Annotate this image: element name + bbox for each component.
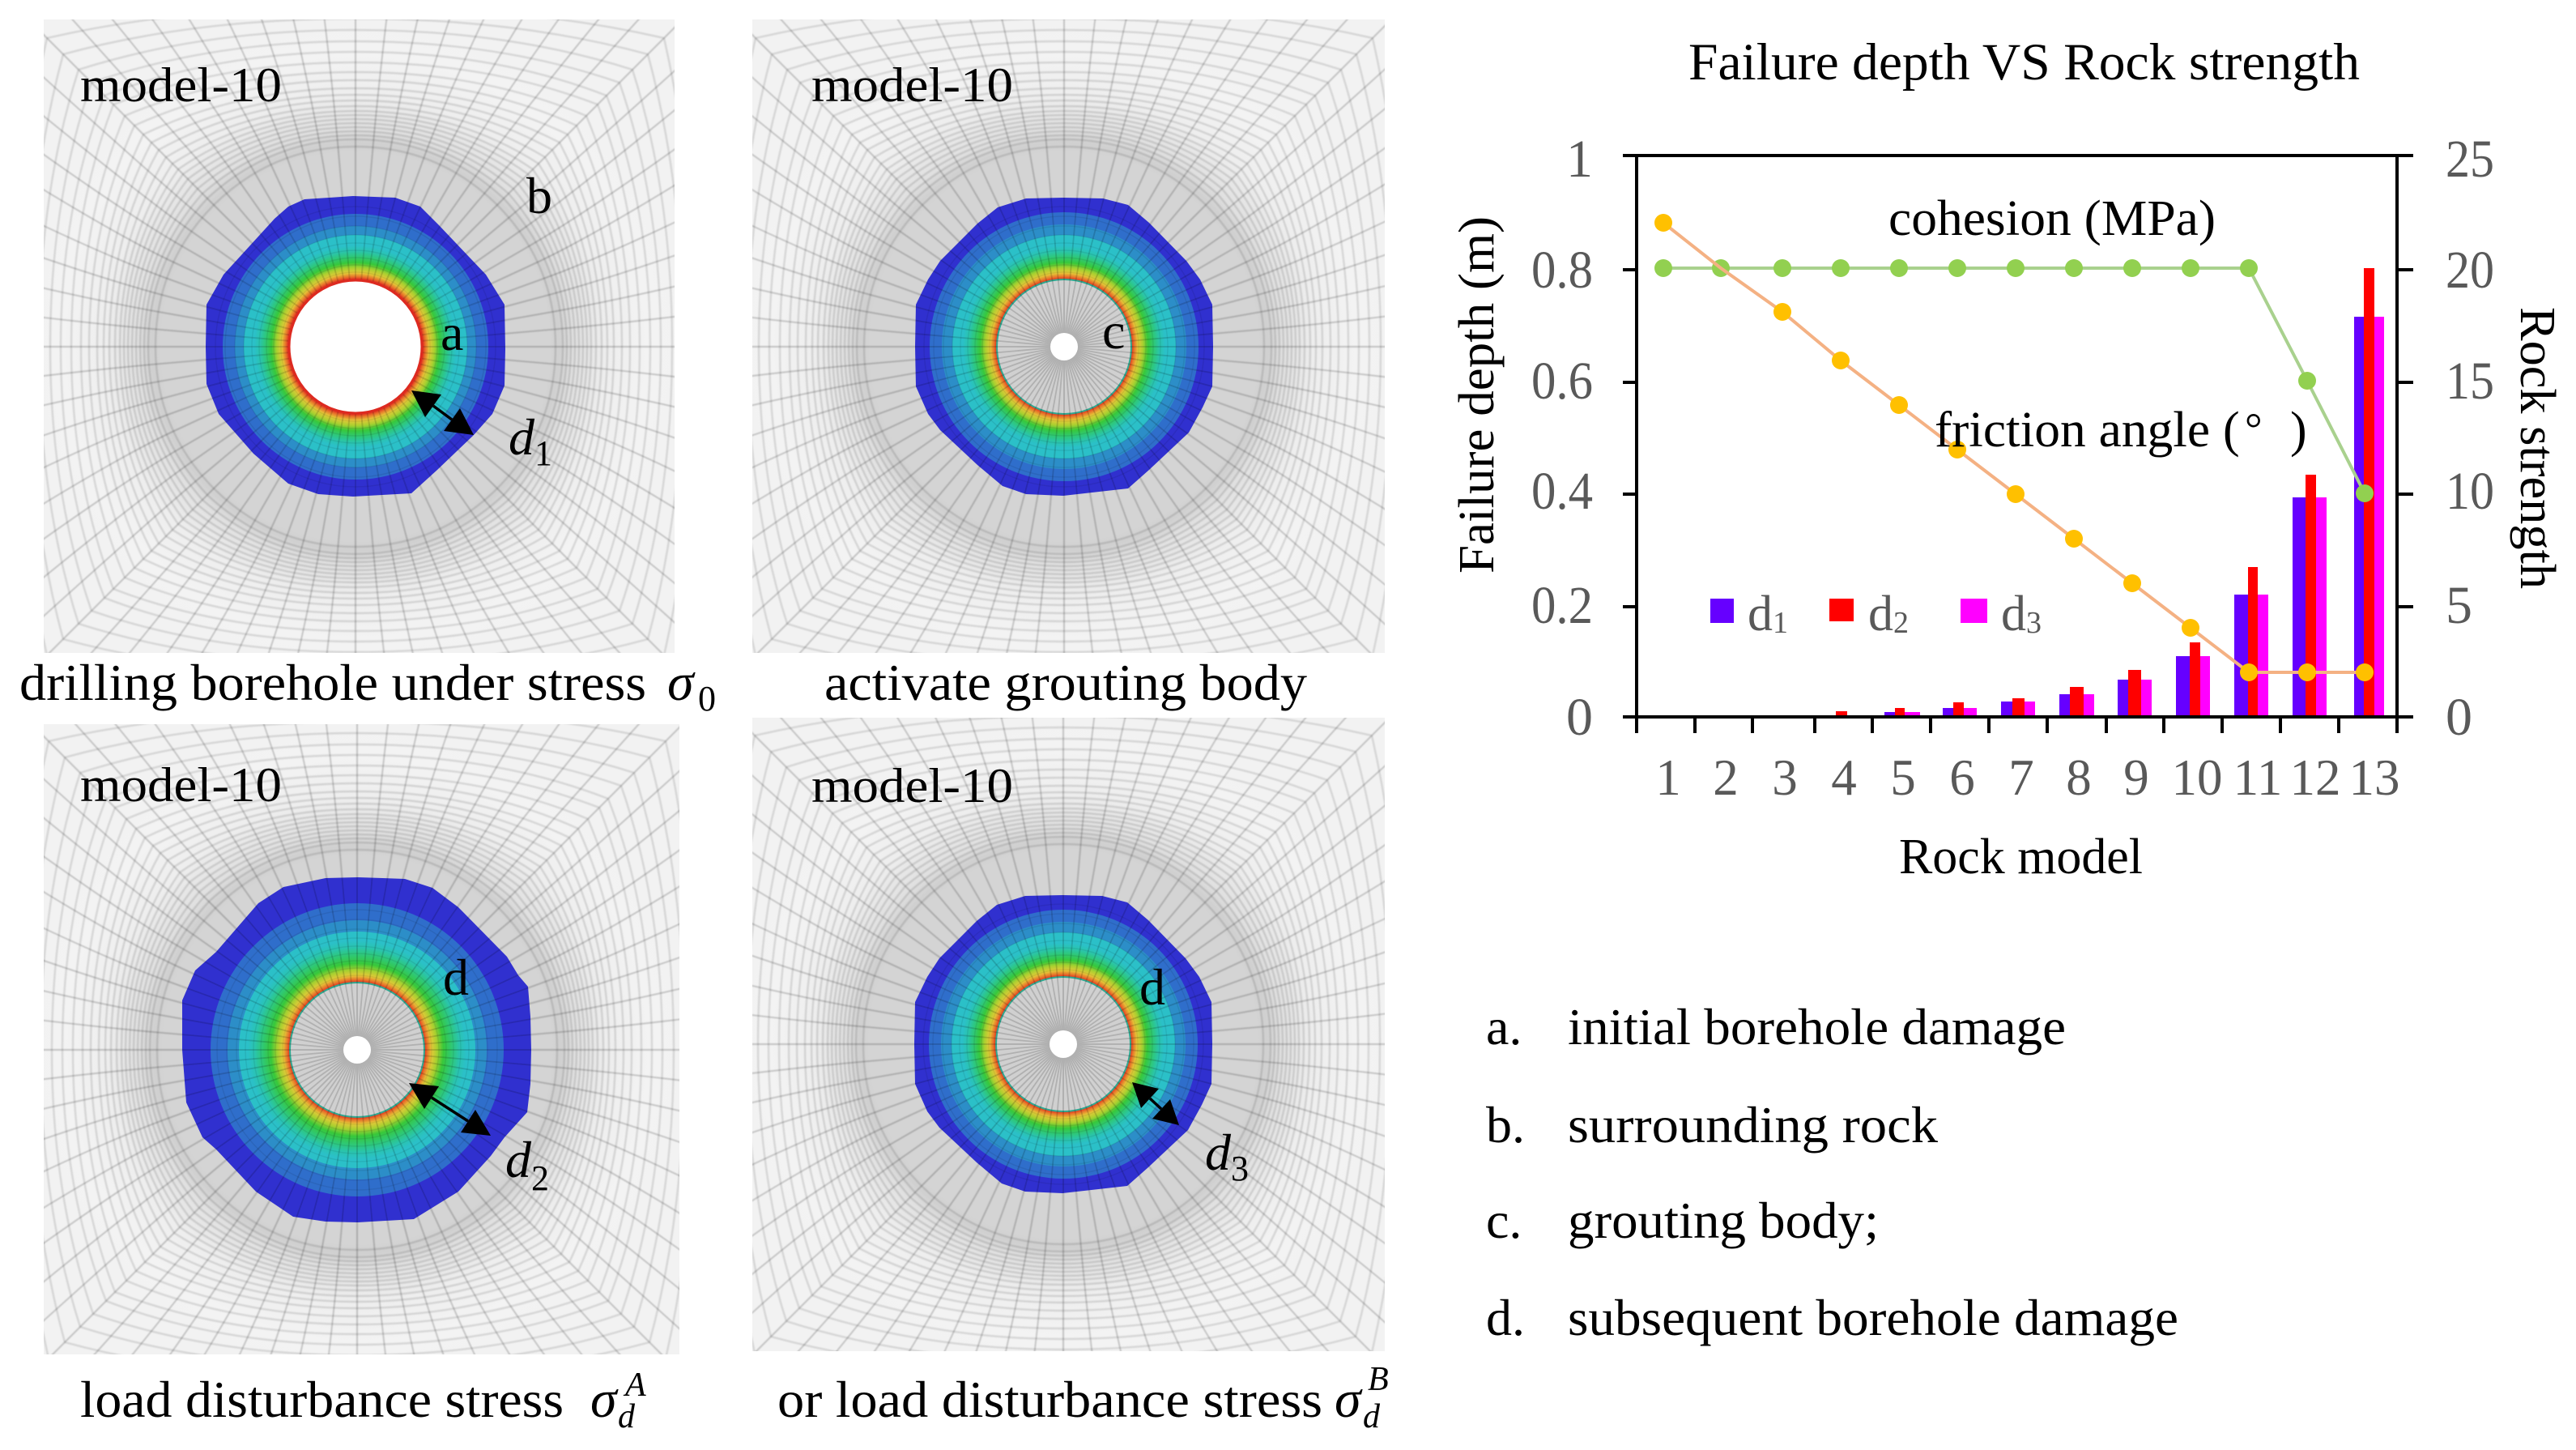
label: d3: 3 — [1231, 1149, 1249, 1188]
caption: load disturbance stress: σ — [590, 1370, 619, 1429]
caption: load disturbance stress: d — [618, 1398, 636, 1435]
right axis tick labels: 20 — [2446, 241, 2494, 300]
legend: d1 d2 d3: 2 — [1893, 606, 1909, 640]
caption: drilling borehole under stress: 0 — [698, 679, 716, 719]
mesh and damage contour 2 — [752, 19, 1385, 653]
item c: c. — [1486, 1192, 1522, 1249]
legend: d1 d2 d3 — [1710, 586, 2042, 642]
mesh and damage contour 3 — [44, 724, 679, 1354]
label: model-10: model-10 — [811, 58, 1013, 112]
series label: friction angle: ) — [2290, 403, 2307, 458]
line: cohesion — [1654, 259, 2374, 502]
caption: or load disturbance stress: B — [1368, 1361, 1389, 1398]
label: d2: 2 — [531, 1158, 549, 1198]
chart: failure depth vs rock strength — [1450, 33, 2565, 885]
x axis tick labels: 3 — [1772, 749, 1798, 806]
label: c: c — [1102, 302, 1125, 360]
legend: d1 d2 d3: d — [1748, 586, 1773, 642]
caption: drilling borehole under stress: drilling borehole under stress — [19, 654, 646, 711]
label: d3: d — [1205, 1124, 1231, 1181]
caption: load disturbance stress: load disturbance stress — [80, 1371, 564, 1428]
axes and ticks — [1623, 156, 2413, 733]
right axis tick labels: 10 — [2446, 462, 2494, 521]
right axis tick labels: 5 — [2446, 576, 2472, 635]
series label: cohesion: cohesion (MPa) — [1888, 191, 2216, 246]
bars: d1 d2 d3 — [1824, 268, 2384, 717]
left axis tick labels: 0.2 — [1531, 576, 1593, 635]
series label: friction angle: ( — [2223, 403, 2240, 458]
left axis tick labels: 1 — [1566, 130, 1593, 189]
panel: load disturbance stress B — [723, 704, 1403, 1435]
caption: or load disturbance stress — [777, 1361, 1389, 1435]
right axis tick labels: 15 — [2446, 352, 2494, 411]
label: model-10: model-10 — [80, 58, 282, 112]
caption: activate grouting body: activate grouting body — [824, 654, 1307, 711]
caption: drilling borehole under stress: σ — [667, 653, 696, 712]
x axis tick labels: 5 — [1890, 749, 1916, 806]
caption: load disturbance stress: A — [623, 1367, 646, 1404]
label: model-10: model-10 — [80, 758, 282, 812]
label: d: d — [1139, 958, 1165, 1016]
legend: d1 d2 d3: d — [1868, 586, 1893, 642]
right axis tick labels — [2446, 130, 2494, 747]
caption: or load disturbance stress: d — [1363, 1398, 1381, 1435]
label: d1: 1 — [534, 433, 552, 473]
x axis tick labels — [1655, 749, 2400, 806]
legend: abbreviations — [1486, 998, 2178, 1346]
x axis tick labels: 13 — [2348, 749, 2400, 806]
x axis tick labels: 11 — [2233, 749, 2282, 806]
label: a: a — [441, 304, 463, 361]
x axis tick labels: 9 — [2123, 749, 2149, 806]
caption: or load disturbance stress: σ — [1335, 1370, 1363, 1429]
legend: d1 d2 d3: 1 — [1773, 606, 1788, 640]
right axis tick labels: 0 — [2446, 688, 2472, 747]
panel: load disturbance stress A — [17, 710, 697, 1435]
secondary y axis title: rock strength: Rock strength — [2510, 307, 2565, 589]
x axis tick labels: 7 — [2008, 749, 2034, 806]
label: b: b — [526, 167, 552, 224]
label: d: d — [443, 949, 469, 1006]
x axis tick labels: 1 — [1655, 749, 1681, 806]
item d: d. — [1486, 1289, 1525, 1346]
line: friction angle — [1654, 214, 2374, 681]
x axis title: rock model: Rock model — [1899, 829, 2143, 885]
legend: d1 d2 d3: d — [2001, 586, 2026, 642]
left axis tick labels: 0.6 — [1531, 352, 1593, 411]
item a: a. — [1486, 998, 1522, 1056]
panel: activate grouting body — [724, 6, 1404, 711]
mesh and damage contour 4 — [752, 718, 1385, 1351]
x axis tick labels: 10 — [2172, 749, 2222, 806]
left axis tick labels: 0.4 — [1531, 462, 1593, 521]
series label: friction angle: friction angle — [1935, 403, 2210, 458]
panel: drilling borehole — [15, 6, 716, 719]
x axis tick labels: 12 — [2290, 749, 2340, 806]
item b: surrounding rock — [1568, 1096, 1938, 1154]
arrow: d3 — [1132, 1082, 1179, 1125]
right axis tick labels: 25 — [2446, 130, 2494, 189]
caption: or load disturbance stress: or load disturbance stress — [777, 1371, 1322, 1428]
item a: initial borehole damage — [1568, 998, 2066, 1056]
x axis tick labels: 6 — [1949, 749, 1975, 806]
mesh and damage contour 1 — [44, 19, 675, 653]
item b: b. — [1486, 1096, 1525, 1154]
left axis tick labels — [1531, 130, 1593, 747]
left axis tick labels: 0 — [1566, 688, 1593, 747]
x axis tick labels: 2 — [1713, 749, 1739, 806]
x axis tick labels: 4 — [1831, 749, 1857, 806]
y axis title: failure depth: Failure depth (m) — [1450, 216, 1505, 574]
arrow: d1 — [411, 390, 474, 435]
chart title: Failure depth VS Rock strength — [1688, 33, 2360, 92]
x axis tick labels: 8 — [2066, 749, 2092, 806]
item c: grouting body; — [1568, 1192, 1879, 1249]
left axis tick labels: 0.8 — [1531, 241, 1593, 300]
label: d2: d — [505, 1131, 531, 1188]
item d: subsequent borehole damage — [1568, 1289, 2178, 1346]
series label: friction angle: ° — [2245, 404, 2263, 453]
legend: d1 d2 d3: 3 — [2026, 606, 2042, 640]
caption: load disturbance stress — [80, 1367, 646, 1435]
label: d1: d — [509, 408, 534, 466]
label: model-10: model-10 — [811, 759, 1013, 812]
arrow: d2 — [409, 1083, 491, 1136]
